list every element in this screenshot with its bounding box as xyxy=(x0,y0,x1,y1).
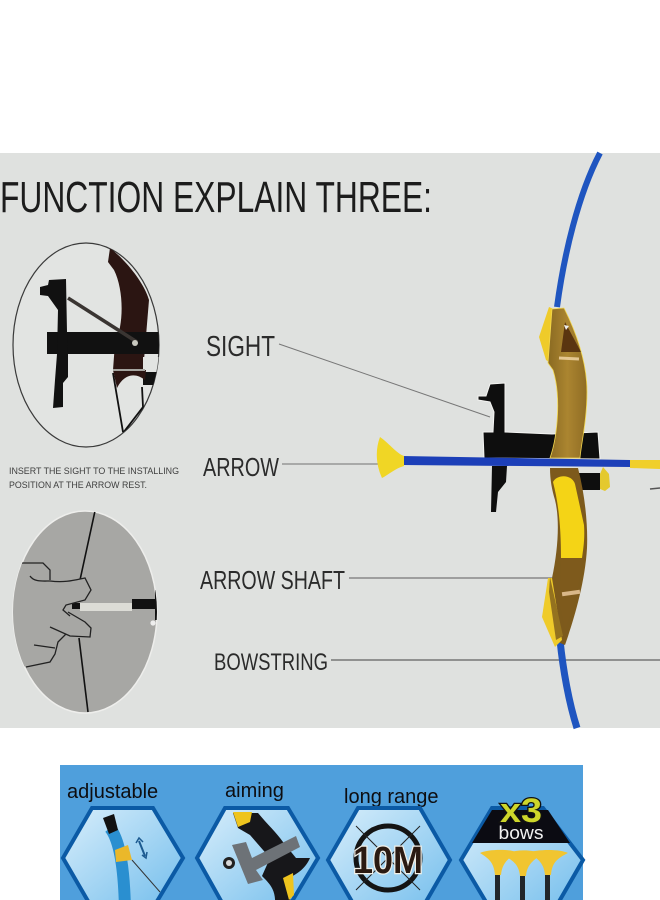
feature: long range xyxy=(328,786,450,900)
black banner xyxy=(472,810,570,843)
label: sight xyxy=(206,331,490,417)
diagram: sight installation circle xyxy=(13,243,161,447)
feature: long range: long range xyxy=(344,786,439,808)
label: sight: SIGHT xyxy=(206,331,275,363)
riser upper yellow tip xyxy=(539,307,556,364)
riser lower yellow tip xyxy=(542,578,562,647)
feature: x3 bows xyxy=(461,792,583,900)
label: bowstring: BOWSTRING xyxy=(214,649,328,676)
distance badge: 10M xyxy=(353,840,423,882)
title: FUNCTION EXPLAIN THREE: xyxy=(0,173,432,222)
feature: aiming xyxy=(197,780,318,900)
feature: adjustable: adjustable xyxy=(67,781,158,803)
feature: x3 bows: bows xyxy=(498,823,544,843)
instruction text: POSITION AT THE ARROW REST. xyxy=(9,480,147,490)
feature strip panel xyxy=(60,765,583,900)
feature: aiming: aiming xyxy=(225,780,284,802)
yellow grip xyxy=(553,476,584,558)
label: arrow shaft: ARROW SHAFT xyxy=(200,565,345,595)
bow illustration xyxy=(377,153,660,728)
riser body xyxy=(548,308,587,458)
upper blue limb xyxy=(557,153,600,307)
lower blue limb xyxy=(560,640,577,728)
x3 badge: x3 xyxy=(500,792,542,830)
feature: adjustable xyxy=(63,781,183,900)
label: arrow: ARROW xyxy=(203,452,279,482)
arrows with suction cups xyxy=(480,850,568,900)
instruction text: INSERT THE SIGHT TO THE INSTALLING xyxy=(9,466,179,476)
yellow nock tag xyxy=(600,467,610,491)
sight bracket xyxy=(478,383,600,512)
arrow xyxy=(377,437,660,478)
riser lower section xyxy=(550,468,587,645)
diagram: hand drawing the bowstring circle xyxy=(10,511,158,713)
photo panel: function explanation xyxy=(0,153,660,728)
